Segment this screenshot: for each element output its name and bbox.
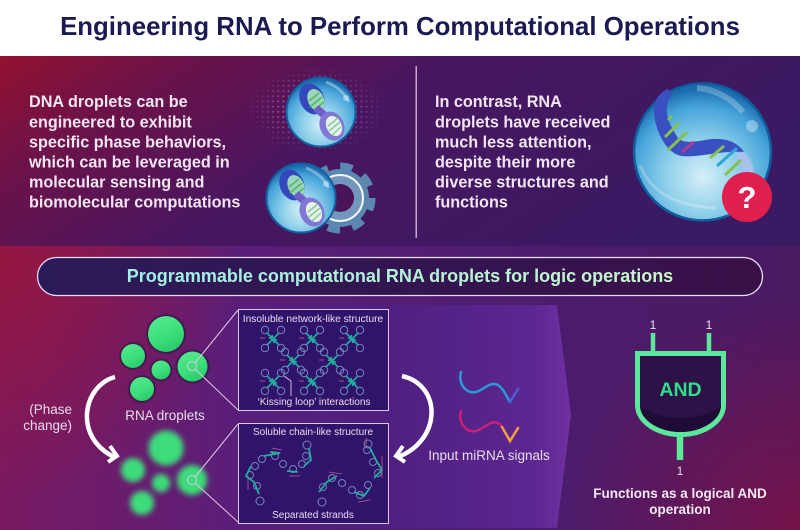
icon: DNA droplet	[286, 78, 356, 146]
RNA droplets, sharp	[120, 314, 209, 402]
panel: soluble chain structure: Separated strands	[272, 510, 354, 521]
label: input miRNA signals: Input miRNA signals	[428, 448, 550, 463]
arrow: phase change	[87, 377, 117, 462]
label: phase change: change)	[23, 418, 72, 433]
text block: DNA droplets: specific phase behaviors,	[29, 134, 226, 152]
chart: AND logic gate	[638, 318, 724, 478]
text block: RNA droplets	[435, 93, 610, 212]
text block: DNA droplets: molecular sensing and	[29, 174, 204, 192]
panel: DNA versus RNA droplets background	[0, 56, 800, 246]
chart: AND logic gate: 1	[650, 318, 657, 332]
icon: question badge: ?	[738, 180, 756, 215]
label: RNA droplets: RNA droplets	[125, 408, 205, 423]
RNA droplets, blurred	[121, 430, 207, 515]
callout lines	[188, 310, 238, 522]
icon: miRNA signal pink	[460, 411, 518, 441]
caption: AND operation: Functions as a logical AND	[593, 486, 767, 501]
panel: soluble chain structure	[238, 424, 388, 524]
dotted halo behind DNA droplet	[252, 70, 382, 149]
text block: DNA droplets: which can be leveraged in	[28, 154, 230, 172]
text block: RNA droplets: functions	[435, 194, 508, 212]
chart: AND logic gate: AND	[659, 379, 702, 401]
text block: RNA droplets: much less attention,	[435, 134, 592, 152]
caption: AND operation	[593, 486, 767, 517]
label: phase change: (Phase	[29, 402, 72, 417]
text block: DNA droplets: engineered to exhibit	[29, 114, 192, 132]
caption: AND operation: operation	[649, 502, 711, 517]
icon: DNA droplet with gear	[266, 164, 336, 232]
text block: DNA droplets: biomolecular computations	[29, 194, 240, 212]
icon: RNA droplet with question mark	[634, 84, 772, 222]
icon: gear	[308, 166, 372, 230]
text block: DNA droplets	[28, 93, 240, 212]
divider	[416, 66, 417, 238]
text block: RNA droplets: droplets have received	[435, 114, 610, 132]
icon: miRNA signal blue	[460, 372, 518, 402]
text block: RNA droplets: In contrast, RNA	[435, 93, 562, 111]
panel: soluble chain structure: Soluble chain-like structure	[253, 427, 373, 438]
heading pill: Programmable computational RNA droplets for logic operations	[127, 266, 673, 286]
panel: insoluble network structure: ‘Kissing loop’ interactions	[258, 397, 370, 408]
label: phase change	[23, 402, 72, 433]
chart: AND logic gate: 1	[706, 318, 713, 332]
text block: RNA droplets: diverse structures and	[435, 174, 609, 192]
arrow: reverse via miRNA signals	[396, 376, 432, 462]
chart: AND logic gate: 1	[677, 464, 684, 478]
title: Engineering RNA to Perform Computational Operations	[60, 13, 740, 41]
text block: DNA droplets: DNA droplets can be	[29, 93, 188, 111]
panel: programmable RNA droplets background	[0, 246, 800, 530]
panel: insoluble network structure: Insoluble network-like structure	[243, 314, 384, 325]
text block: RNA droplets: despite their more	[435, 154, 575, 172]
arrow-shaped panel behind droplet mechanism	[200, 305, 571, 528]
heading pill	[38, 258, 762, 296]
panel: insoluble network structure	[238, 310, 388, 410]
